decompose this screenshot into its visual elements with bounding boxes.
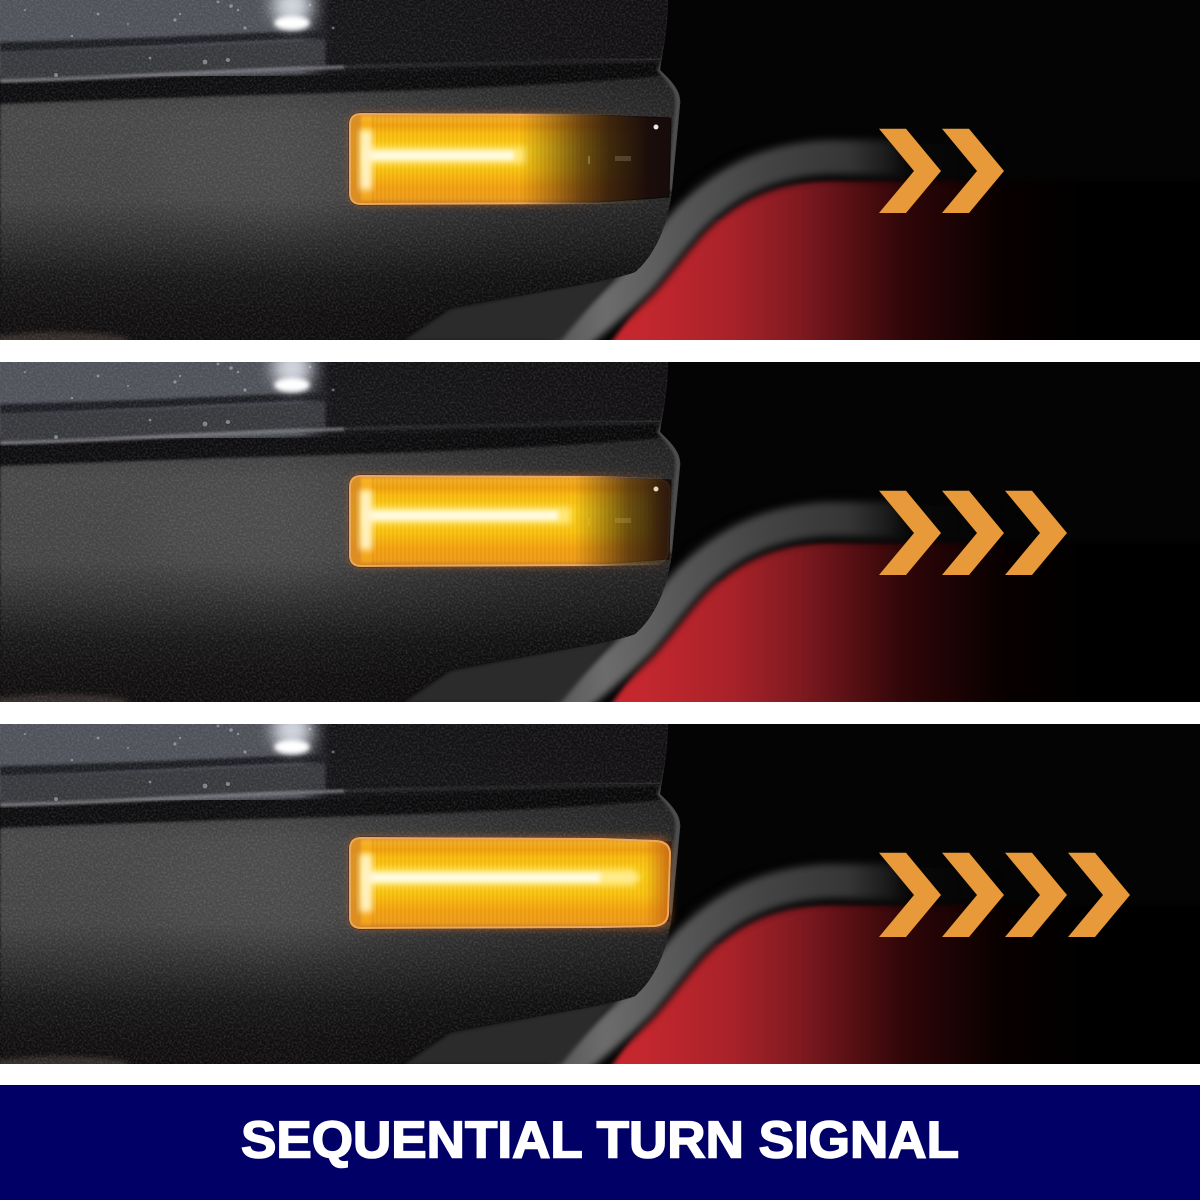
panel 1: two chevrons, signal partly lit (0, 0, 1200, 350)
car mirror and red door photo scene (0, 348, 1200, 712)
title text: SEQUENTIAL TURN SIGNAL (241, 1112, 959, 1170)
arrows: four chevrons (879, 853, 1130, 937)
arrows: two chevrons (879, 129, 1004, 213)
panel 2: three chevrons, signal mostly lit (0, 348, 1200, 712)
turn signal lens, second stage (340, 470, 680, 574)
panel 3: four chevrons, signal fully lit (0, 710, 1200, 1074)
arrows: three chevrons (879, 491, 1067, 575)
car mirror and red door photo scene (0, 710, 1200, 1074)
turn signal lens, fully lit (340, 832, 680, 936)
title banner (0, 1085, 1200, 1200)
turn signal lens, first stage (340, 108, 680, 212)
car mirror and red door photo scene (0, 0, 1200, 350)
